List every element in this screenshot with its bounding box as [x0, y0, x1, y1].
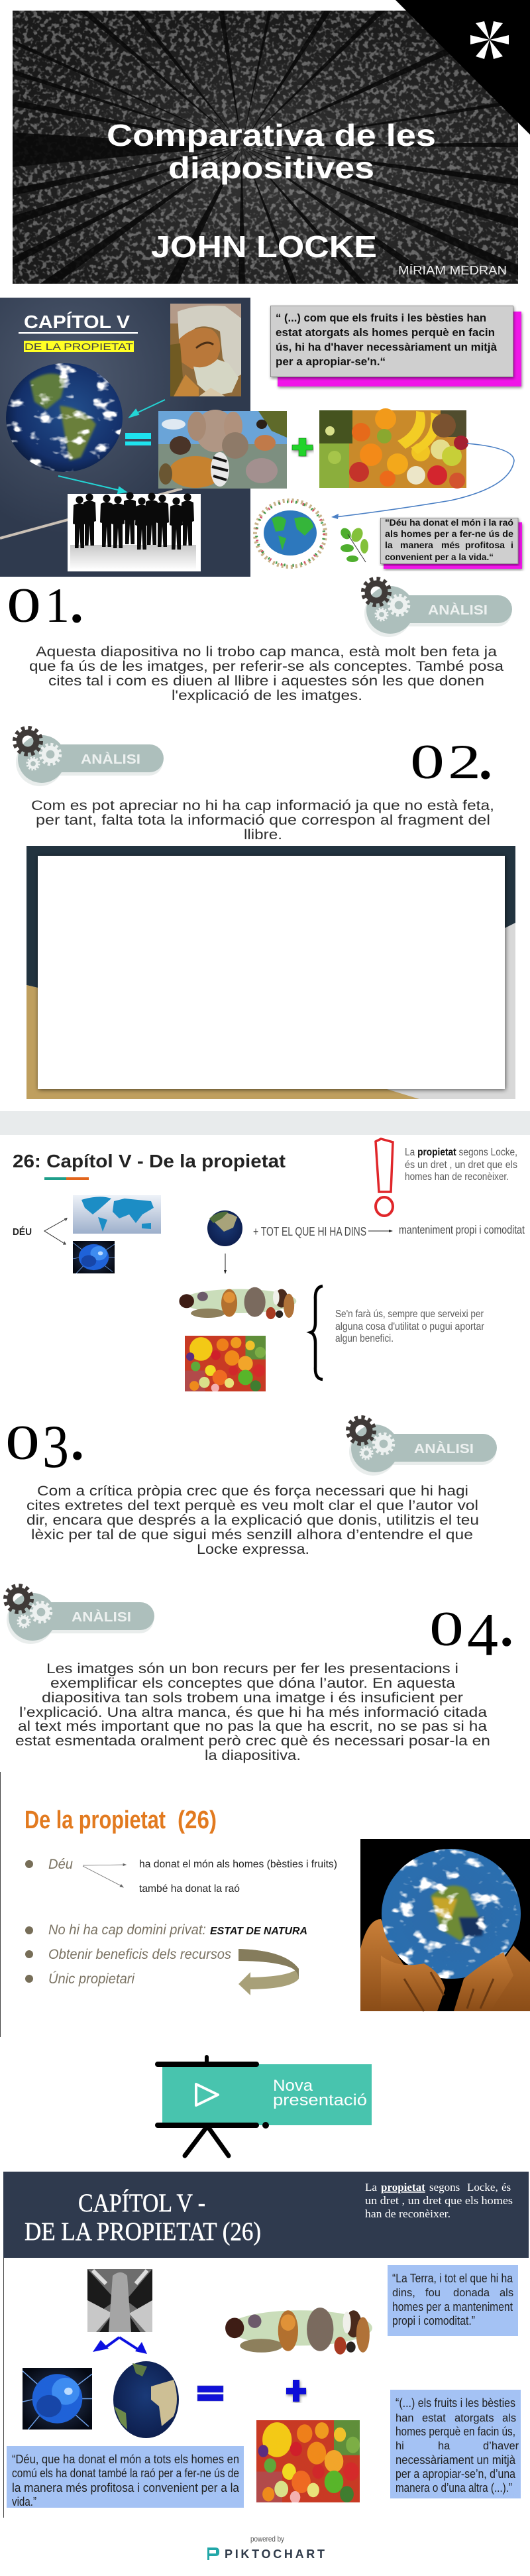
- quote: fruits and beasts: als: [502, 2412, 516, 2424]
- quote: fruits and beasts: atorgats: [454, 2412, 494, 2424]
- text block: analysis two: [31, 798, 494, 843]
- image: fruits: [319, 408, 468, 489]
- number 03: 3: [42, 1413, 69, 1480]
- text block: analysis one: Aquesta diapositiva no li trobo cap manca, està molt ben feta ja: [36, 644, 497, 660]
- badge: analisi four: [5, 1586, 154, 1644]
- text: new presentation: presentació: [273, 2091, 367, 2109]
- heading: de la propietat 26: (26): [178, 1806, 217, 1834]
- bullet list: ESTAT DE NATURA: [210, 1926, 307, 1937]
- bullet list: Obtenir beneficis dels recursos: [48, 1947, 231, 1962]
- text block: analysis four: estat esmentada oralment però crec què és necessari posar-la en: [15, 1733, 490, 1749]
- bullet list: Déu: [48, 1857, 73, 1872]
- image: world map: [73, 1195, 161, 1234]
- quote: god gave: la manera més profitosa i convenient per a la: [12, 2481, 240, 2494]
- bullet list: ha donat el món als homes (bèsties i fruits): [139, 1859, 337, 1870]
- footer: powered by piktochart: PIKTOCHART: [225, 2547, 325, 2561]
- note: propietat: La: [365, 2181, 377, 2194]
- quote: fruits and beasts: d’haver: [483, 2440, 519, 2452]
- quote box two: convenient per a la vida.“: [385, 552, 494, 562]
- quote: god gave: [7, 2446, 244, 2508]
- heading: chapter v: [25, 2188, 261, 2246]
- badge: analisi four: ANÀLISI: [72, 1610, 131, 1625]
- quote: earth: fou: [425, 2287, 441, 2299]
- quote box two: la: [385, 540, 393, 550]
- heading: chapter: CAPÍTOL V: [24, 312, 130, 332]
- hero: forest photograph: [13, 11, 518, 284]
- icon: red exclamation mark: [376, 1139, 393, 1216]
- image: animal strip: [179, 1287, 296, 1319]
- text block: analysis two: llibre.: [244, 827, 282, 843]
- presentation easel: [158, 2057, 372, 2156]
- quote box two: manera: [400, 540, 433, 550]
- quote: fruits and beasts: “(...) els fruits i les bèsties: [396, 2396, 515, 2410]
- text block: analysis two: Com es pot apreciar no hi ha cap informació ja que no està feta,: [31, 798, 494, 813]
- equals sign: [125, 433, 151, 445]
- text block: analysis three: dir, encara que després a la explicació que donis, utilitzis el teu: [26, 1513, 479, 1528]
- image: people silhouettes: [68, 492, 201, 571]
- number 03: 0: [5, 1416, 40, 1470]
- text block: analysis one: que fa ús de les imatges, per referir-se als conceptes. També posa: [29, 659, 504, 674]
- arrow: earth to people: [58, 476, 126, 493]
- number 01: .: [68, 557, 86, 638]
- image: earth asia: [207, 1210, 242, 1246]
- left edge line: [0, 1772, 1, 2037]
- quote: fruits and beasts: estat: [422, 2412, 446, 2424]
- equals sign blue: [197, 2386, 223, 2401]
- image: earth americas: [6, 363, 123, 472]
- heading: de la propietat 26: De la propietat: [25, 1806, 166, 1834]
- image: earth africa: [113, 2361, 179, 2438]
- badge: analisi three: ANÀLISI: [414, 1441, 474, 1456]
- quote box two: [380, 517, 522, 569]
- title: Comparativa de les: [107, 118, 436, 152]
- quote: fruits and beasts: manera o d’una altra (...).”: [396, 2481, 512, 2494]
- arrows: Déu split: [44, 1218, 67, 1244]
- bullet list: [25, 1857, 337, 1987]
- icon: leaves: [339, 526, 368, 562]
- panel: empty slide frame: [26, 846, 515, 1099]
- text block: analysis four: al text més important que no pas la que ha escrit, no se pas si ha: [18, 1719, 487, 1734]
- text: benefit: Se'n farà ús, sempre que serveixi per: [335, 1309, 484, 1320]
- bullet list: No hi ha cap domini privat:: [48, 1922, 206, 1938]
- footer: powered by piktochart: [207, 2534, 325, 2561]
- text block: analysis four: exemplificar els conceptes que dóna l’autor. En aquesta: [50, 1676, 455, 1691]
- note: propietat: és: [502, 2181, 511, 2194]
- text block: analysis four: la diapositiva.: [205, 1748, 301, 1763]
- text block: analysis four: [15, 1661, 490, 1763]
- number 04: 4: [467, 1601, 498, 1669]
- bullet list: Únic propietari: [48, 1971, 135, 1987]
- quote box two: més: [441, 540, 460, 550]
- text block: analysis three: Locke expressa.: [197, 1542, 309, 1557]
- note: propietat: propietat: [381, 2181, 425, 2194]
- arrow: god to earth: [130, 400, 165, 417]
- image: animals group: [158, 410, 287, 489]
- note: propietat: Locke,: [467, 2181, 498, 2194]
- icon: piktochart logo: [207, 2547, 219, 2560]
- number 01: 0: [7, 579, 41, 633]
- number 02: .: [476, 713, 494, 794]
- note: propietat: segons: [429, 2181, 460, 2194]
- quote box one: [270, 306, 521, 386]
- arrow: curved ribbon: [238, 1949, 299, 1995]
- quote: god gave: vida.”: [12, 2495, 36, 2508]
- text block: analysis three: lèxic per tal de que sigui més senzill alhora d’entendre el que: [31, 1527, 473, 1543]
- quote: fruits and beasts: [390, 2390, 521, 2498]
- quote: fruits and beasts: han: [396, 2412, 414, 2424]
- image: earth held in hands: [360, 1839, 530, 2011]
- quote: fruits and beasts: per a apropiar-se’n, d’una: [396, 2467, 516, 2481]
- plus sign blue: [286, 2380, 306, 2402]
- icon: world with children: [255, 500, 325, 567]
- text: benefit: alguna cosa d'utilitat o pugui aportar: [335, 1321, 484, 1332]
- plus sign: [292, 438, 313, 456]
- text block: analysis three: Com a crítica pròpia crec que és força necessari que hi hagi: [37, 1484, 468, 1499]
- quote box two: i: [511, 540, 513, 550]
- quote box two: als homes per a fer-ne ús de: [385, 528, 513, 539]
- arrow: earth down: [224, 1254, 227, 1274]
- bullet list: també ha donat la raó: [139, 1883, 240, 1895]
- quote box two: "Déu ha donat el món i la raó: [385, 517, 513, 528]
- text: everything inside: + TOT EL QUE HI HA DINS: [253, 1225, 366, 1238]
- image: brain two: [23, 2368, 92, 2430]
- number 02: 2: [448, 735, 481, 790]
- badge: analisi two: ANÀLISI: [81, 752, 140, 767]
- number 02: 0: [410, 735, 445, 790]
- note: propietat: han de reconèixer.: [365, 2207, 450, 2220]
- heading: chapter v: DE LA PROPIETAT (26): [25, 2217, 261, 2246]
- image: god painting: [170, 304, 241, 396]
- text: new presentation: Nova: [273, 2077, 313, 2095]
- heading: slide two: 26: Capítol V - De la propietat: [13, 1151, 286, 1171]
- image: animal strip two: [225, 2308, 372, 2355]
- title: diapositives: [168, 150, 374, 185]
- grey band: [0, 1111, 530, 1135]
- quote box one: estat atorgats als homes perquè en facin: [276, 326, 495, 339]
- heading: slide two: [13, 1151, 286, 1180]
- note: propietat: [365, 2181, 513, 2220]
- label: de la propietat: DE LA PROPIETAT: [25, 341, 133, 353]
- quote: earth: [388, 2265, 518, 2336]
- note: propietat: La propietat segons Locke,: [405, 1147, 517, 1158]
- number 04: .: [498, 1580, 515, 1661]
- quote box one: “ (...) com que els fruits i les bèsties han: [276, 312, 486, 324]
- text block: analysis three: cites extretes del text perquè es veu molt clar el que l’autor vol: [26, 1498, 478, 1513]
- text block: analysis four: l’explicació. Una altra manca, és que hi ha més informació citada: [19, 1705, 487, 1720]
- quote: earth: als: [500, 2287, 513, 2299]
- badge: analisi two: [15, 728, 164, 786]
- text block: analysis four: Les imatges són un bon recurs per fer les presentacions i: [46, 1661, 458, 1676]
- quote: earth: homes per a manteniment: [392, 2300, 513, 2313]
- footer: powered by piktochart: powered by: [250, 2534, 284, 2544]
- arrow: curved blue: [331, 443, 514, 519]
- note: propietat: [405, 1147, 517, 1183]
- note: propietat: és un dret , un dret que els: [405, 1159, 517, 1171]
- quote box two: profitosa: [465, 540, 505, 550]
- icon: white asterisk: [470, 21, 509, 59]
- label: Déu: DÉU: [13, 1226, 32, 1238]
- text block: analysis one: [29, 644, 504, 703]
- quote: god gave: “Déu, que ha donat el món a tots els homes en: [12, 2453, 239, 2466]
- title: [107, 118, 436, 264]
- note: propietat: un dret , un dret que els homes: [365, 2194, 513, 2207]
- quote: earth: propi i comoditat.”: [392, 2314, 475, 2327]
- text: benefit: algun benefici.: [335, 1333, 394, 1344]
- panel: slide one chapter V: [0, 298, 250, 577]
- icon: play: [196, 2084, 218, 2105]
- text block: analysis four: diapositiva tan sols trobem una imatge i és insuficient per: [42, 1690, 463, 1706]
- text block: analysis three: [26, 1484, 479, 1557]
- number 04: 0: [429, 1602, 464, 1657]
- quote: fruits and beasts: ha: [438, 2440, 450, 2452]
- quote box one: ús, hi ha d'haver necessàriament un mitjà: [276, 341, 498, 353]
- quote: fruits and beasts: necessàriament un mitjà: [396, 2453, 516, 2467]
- text block: analysis two: per tant, falta tota la informació que correspon al fragment del: [36, 813, 490, 828]
- panel: dark header: [3, 2172, 529, 2258]
- badge: analisi one: [363, 579, 512, 637]
- text: benefit: [335, 1309, 484, 1344]
- image: brain: [73, 1241, 115, 1273]
- number 03: .: [68, 1394, 86, 1475]
- quote box one: per a apropiar-se'n.“: [276, 355, 386, 368]
- arrows: blue chevron: [93, 2337, 147, 2354]
- quote: earth: “La Terra, i tot el que hi ha: [392, 2272, 513, 2285]
- quote: earth: dins,: [392, 2287, 415, 2299]
- text block: analysis one: l'explicació de les imatges.: [172, 688, 362, 703]
- quote: god gave: comú els ha donat també la raó per a fer-ne ús de: [12, 2467, 239, 2480]
- number 01: 1: [45, 579, 70, 633]
- corner triangle with asterisk: [396, 0, 530, 135]
- diagonal line: [0, 489, 182, 538]
- badge: analisi one: ANÀLISI: [428, 603, 488, 618]
- image: fruit mix two: [256, 2420, 360, 2504]
- quote: earth: donada: [453, 2287, 490, 2299]
- image: fruit mix: [185, 1336, 266, 1392]
- image: god engraving: [87, 2269, 152, 2332]
- badge: analisi three: [348, 1417, 497, 1476]
- button panel: [162, 2064, 372, 2125]
- icon: curly brace: [311, 1286, 323, 1379]
- text block: analysis one: cites tal i com es diuen al llibre i aquestes són les que donen: [48, 673, 484, 689]
- heading: chapter v: CAPÍTOL V -: [78, 2188, 205, 2217]
- left edge line two: [3, 2258, 4, 2518]
- title: JOHN LOCKE: [151, 229, 377, 264]
- arrow: to upkeep: [368, 1230, 393, 1232]
- quote: fruits and beasts: hi: [396, 2440, 404, 2452]
- author: MÍRIAM MEDRAN: [398, 264, 507, 277]
- text: new presentation: [273, 2077, 367, 2109]
- note: propietat: homes han de reconèixer.: [405, 1171, 509, 1183]
